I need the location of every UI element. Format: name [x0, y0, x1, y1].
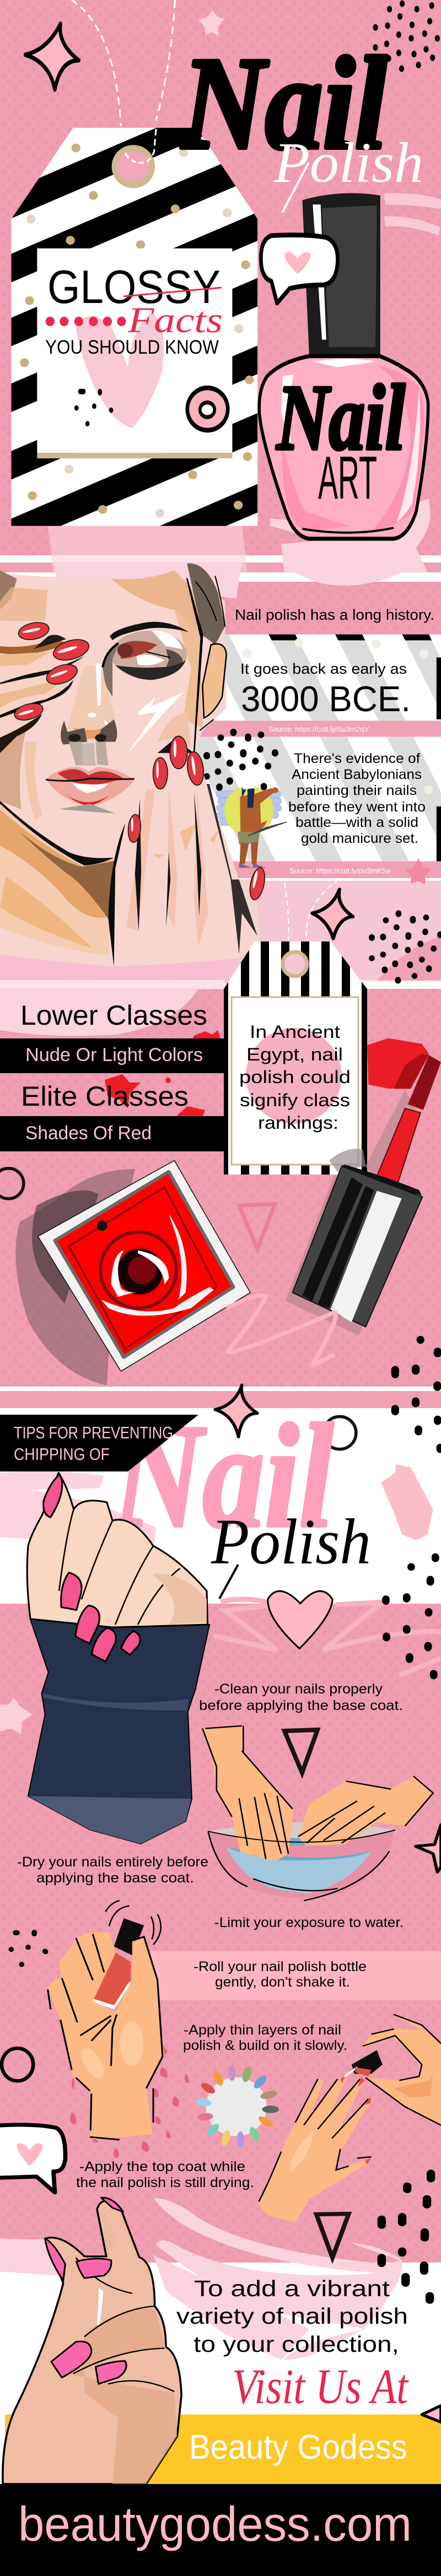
tip: thin layers [183, 2022, 347, 2053]
red dots [46, 317, 126, 326]
tip: dry nails: applying the base coat. [36, 1870, 194, 1886]
heading: Facts: Facts [127, 300, 223, 340]
pink nails [45, 2198, 126, 2384]
illustration: woman's face with hands [0, 563, 441, 989]
text: Babylonians [288, 751, 426, 846]
title: Nail: Nail [180, 30, 387, 176]
tip: roll bottle: -Roll your nail polish bottle [193, 1959, 367, 1974]
polish cap [286, 1165, 422, 1335]
pink star lower right [406, 858, 432, 884]
red brush mark [367, 1038, 429, 1089]
stripe caps [268, 635, 441, 861]
icon: ring [0, 1168, 24, 1199]
fist [27, 1473, 208, 1627]
faded confetti [243, 638, 433, 794]
hand with painted nails [259, 2075, 371, 2223]
heading banner [0, 1415, 198, 1471]
card text: polish could [239, 1067, 351, 1087]
gold confetti [20, 144, 254, 517]
scribble under heart [214, 1599, 441, 1675]
hanging string [72, 0, 175, 126]
icon: ring [2, 2048, 33, 2081]
heading banner: CHIPPING OF [14, 1444, 110, 1464]
icon: star [215, 1385, 257, 1437]
tip: limit water: -Limit your exposure to water. [214, 1915, 404, 1930]
heading: you should know: YOU SHOULD KNOW [45, 337, 219, 358]
source link 1: Source: https://cutt.ly/Su3m2qV [268, 725, 369, 733]
nose [61, 663, 117, 766]
tip: clean nails: -Clean your nails properly [214, 1681, 383, 1697]
text: Babylonians: painting their nails [297, 783, 417, 798]
eyebrow [110, 622, 189, 640]
text: vibrant variety [176, 2276, 408, 2357]
color swatch wheel [195, 2065, 279, 2148]
tag and bottle artwork [11, 0, 441, 618]
right hand on cheek [108, 739, 260, 967]
card text: signify class [240, 1090, 350, 1110]
brush shadow [365, 1090, 416, 1183]
title: Polish black: Polish [211, 1506, 371, 1578]
dots cluster [372, 913, 440, 981]
text: vibrant variety: to your collection, [193, 2331, 399, 2357]
dots [386, 1374, 440, 1675]
text: early as: It goes back as early as [240, 661, 407, 677]
polish brush handle [408, 1055, 441, 1110]
dots [395, 1340, 438, 1411]
tip: top coat: -Apply the top coat while [79, 2159, 245, 2174]
highlighted band [149, 1951, 441, 2000]
card text: In Ancient [250, 1022, 340, 1042]
dots cluster [375, 4, 437, 69]
pink nails [44, 1474, 140, 1662]
icon: star outline [25, 24, 79, 89]
text: Babylonians: before they went into [288, 799, 426, 815]
footer: beautygodess.com [18, 2497, 412, 2551]
text: Babylonians: Ancient Babylonians [292, 767, 422, 782]
heading: Facts [123, 288, 223, 340]
text: vibrant variety: To add a vibrant [194, 2276, 390, 2301]
icon: star [312, 889, 353, 939]
card text [239, 1022, 351, 1133]
lips [46, 767, 135, 814]
ear [202, 644, 227, 718]
text: vibrant variety: variety of nail polish [176, 2303, 408, 2329]
tip: roll bottle: gently, don't shake it. [215, 1974, 350, 1990]
tip: thin layers: -Apply thin layers of nail [184, 2022, 341, 2038]
red splatter [105, 1030, 220, 1116]
pale brush strokes [0, 1471, 156, 1543]
tips heading artwork [0, 1374, 441, 1734]
tip: dry nails: -Dry your nails entirely before [17, 1854, 208, 1870]
icon: heart [268, 1591, 332, 1648]
nail polish bottle [259, 193, 428, 539]
dots [381, 2173, 431, 2300]
tag eyelet [114, 148, 153, 185]
square polish bottle top view [15, 1161, 250, 1386]
black dots [207, 732, 275, 788]
icon: triangle [316, 2214, 349, 2258]
sleeve [28, 1616, 209, 1844]
text: elite classes: Elite Classes [21, 1081, 189, 1112]
card text: Egypt, nail [246, 1045, 343, 1064]
small dots [77, 392, 111, 424]
motion arcs [105, 1901, 161, 1945]
red nails on right hand [127, 736, 267, 901]
triangle outline [239, 1204, 275, 1249]
section: title and gift tag: ART [318, 444, 377, 512]
icon: star at right [416, 1825, 441, 1872]
script: visit us at: Visit Us At [232, 2359, 409, 2414]
bottle and brush artwork [0, 1038, 441, 1411]
striped panels [195, 635, 441, 862]
stat: 3000 BCE: 3000 BCE. [241, 679, 411, 719]
pale brush strokes [0, 2198, 402, 2359]
yellow band [5, 2415, 441, 2484]
tip: top coat [76, 2159, 254, 2190]
scribble [227, 1295, 336, 1366]
tip: thin layers: polish & build on it slowly. [183, 2038, 347, 2053]
washing hands in bowl [202, 1726, 433, 1901]
section: class rankings [0, 941, 441, 1411]
neck shadows [0, 804, 115, 955]
call to action artwork [0, 2173, 441, 2484]
card text: rankings: [258, 1113, 338, 1133]
inner white card [37, 248, 232, 453]
band: shades of red [0, 1116, 224, 1151]
icon: star edge [422, 2406, 441, 2422]
text: Babylonians: There's evidence of [294, 751, 420, 766]
section: tips heading [0, 1374, 441, 1844]
card [232, 997, 358, 1165]
tip: clean nails: before applying the base coat. [199, 1698, 403, 1713]
brushed heart [76, 312, 164, 428]
section: title and gift tag [11, 0, 441, 618]
left hand on eye [0, 621, 87, 753]
section: call to action [0, 2173, 441, 2576]
jaw line [0, 801, 114, 865]
icon: triangle [284, 1730, 318, 1773]
icon: small pink star [198, 10, 224, 36]
zigzag highlight [128, 692, 184, 753]
tip: roll bottle [193, 1959, 367, 1990]
hand holding polish brush [345, 2015, 441, 2125]
hand rolling polish bottle [48, 1901, 189, 2158]
closed eye [103, 631, 187, 697]
pale wash behind lower classes [0, 988, 198, 1036]
source link 2: Source: https://cutt.ly/pu3mK5w [289, 867, 391, 875]
speech bubble [0, 2125, 65, 2193]
heading: Glossy: GLOSSY [47, 261, 220, 313]
title: Polish: Polish [273, 131, 423, 194]
icon: target circle [187, 388, 228, 430]
bottle label: Nail: Nail [276, 366, 405, 469]
band: nude or light colors [0, 1038, 224, 1073]
text: Babylonians: gold manicure set. [301, 831, 418, 846]
dots cluster [11, 1932, 46, 1965]
darker corner wave [377, 936, 441, 981]
section: tips illustrations [0, 1726, 441, 2223]
pale brush below face [0, 955, 239, 983]
red nails on left hand [13, 620, 92, 723]
tips artwork [0, 1726, 441, 2223]
illustration: finger snap hand [3, 2198, 181, 2484]
brush strokes around bottle [270, 193, 441, 573]
star bottom left [0, 1698, 33, 1734]
footer [0, 2484, 441, 2576]
tip: top coat: the nail polish is still drying. [76, 2175, 254, 2190]
decorative strings [284, 880, 339, 940]
speech bubble with heart [261, 235, 337, 303]
gift tag [11, 128, 258, 526]
text: Babylonians: battle—with a solid [295, 815, 418, 830]
title: Nail pink: Nail [111, 1394, 334, 1558]
tip: dry nails [17, 1854, 208, 1886]
icon: ring [324, 1416, 356, 1449]
tip: clean nails [199, 1681, 403, 1713]
pale brush under tag [48, 526, 248, 573]
illustration: fist with pink nails in navy sleeve [27, 1473, 209, 1844]
hair and forehead leaves [111, 570, 197, 629]
text: long history: Nail polish has a long history. [235, 607, 434, 623]
text: lower classes: Lower Classes [20, 1000, 207, 1031]
striped tag: ancient Egypt [224, 941, 367, 1175]
eyelet [283, 952, 307, 976]
figure: ancient Babylonian warrior [217, 782, 287, 868]
pale brush at top [53, 562, 242, 598]
brand name on yellow band: Beauty Godess [189, 2428, 407, 2466]
history backgrounds and art [53, 562, 441, 884]
section: history [0, 562, 441, 989]
heading banner: TIPS FOR PREVENTING [14, 1423, 173, 1442]
band: shades of red: Shades Of Red [25, 1123, 152, 1144]
band: nude or light colors: Nude Or Light Colors [25, 1045, 203, 1065]
